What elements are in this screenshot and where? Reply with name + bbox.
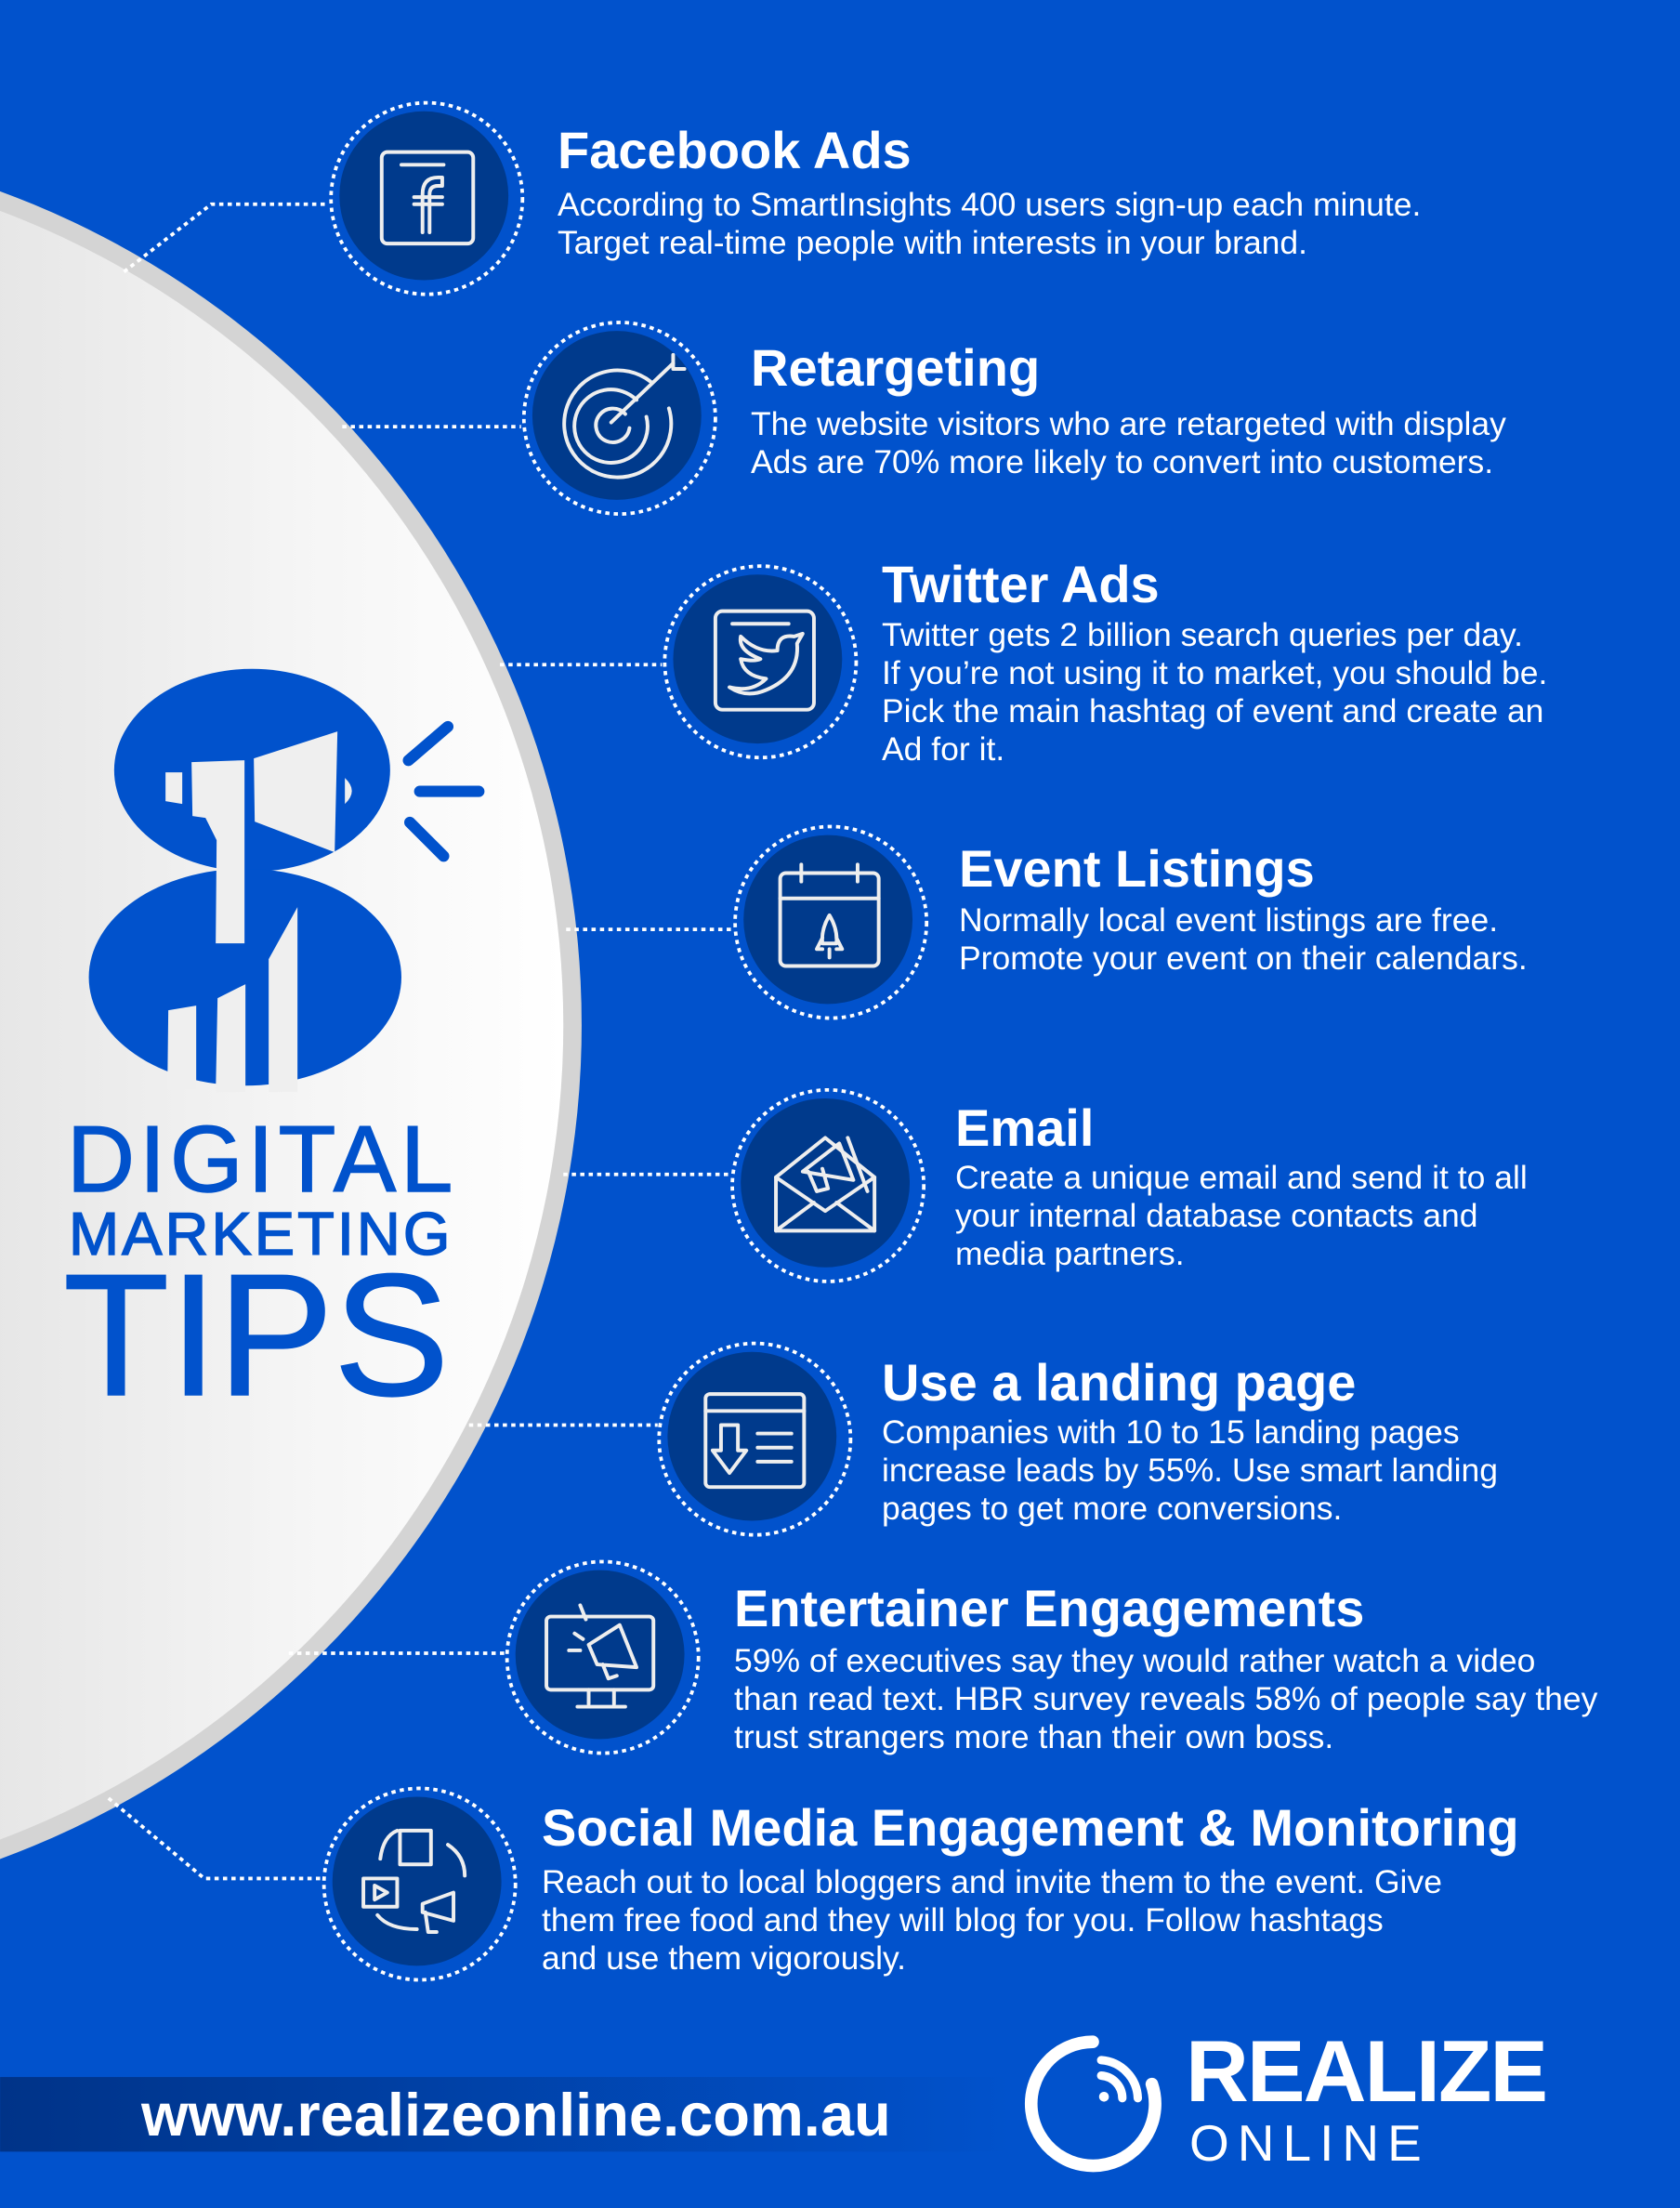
icon: facebook	[382, 152, 473, 243]
text: 59% of executives say they would rather watch a video	[734, 1642, 1535, 1679]
text: The website visitors who are retargeted with display	[751, 405, 1506, 442]
text: Email	[955, 1098, 1094, 1157]
text: Social Media Engagement & Monitoring	[542, 1798, 1519, 1857]
tip 3	[882, 555, 1547, 768]
logo text: ONLINE	[1189, 2114, 1430, 2172]
text: your internal database contacts and	[955, 1197, 1477, 1234]
text: Reach out to local bloggers and invite them to the event. Give	[542, 1863, 1442, 1900]
tip 5	[955, 1098, 1528, 1272]
tip 1	[558, 121, 1421, 261]
text: Target real-time people with interests in your brand.	[558, 224, 1307, 261]
text: MARKETING	[69, 1200, 453, 1268]
text: According to SmartInsights 400 users sign-up each minute.	[558, 186, 1421, 223]
footer url: www.realizeonline.com.au	[141, 2081, 891, 2149]
icon: email	[776, 1137, 874, 1230]
tip 6	[882, 1353, 1498, 1527]
icon circles	[324, 103, 926, 1980]
footer band	[0, 2077, 1014, 2151]
text: DIGITAL	[67, 1108, 457, 1212]
text: pages to get more conversions.	[882, 1490, 1342, 1527]
text: media partners.	[955, 1235, 1185, 1272]
text: TIPS	[63, 1238, 450, 1432]
icon: social cycle	[363, 1831, 465, 1932]
icons	[363, 152, 879, 1932]
tip 7	[734, 1579, 1598, 1755]
text: Facebook Ads	[558, 121, 912, 179]
text: Entertainer Engagements	[734, 1579, 1364, 1637]
text: Ads are 70% more likely to convert into customers.	[751, 443, 1493, 480]
big title: DIGITAL MARKETING TIPS	[63, 1108, 457, 1432]
logo icon	[1031, 2042, 1155, 2166]
text: increase leads by 55%. Use smart landing	[882, 1452, 1498, 1489]
text: trust strangers more than their own boss.	[734, 1718, 1333, 1755]
text: Promote your event on their calendars.	[959, 940, 1528, 977]
tip 2	[751, 338, 1506, 480]
text: Create a unique email and send it to all	[955, 1159, 1528, 1196]
icon: twitter	[715, 611, 814, 710]
text: Twitter gets 2 billion search queries per day.	[882, 616, 1523, 653]
text: Event Listings	[959, 839, 1315, 898]
text: Ad for it.	[882, 730, 1004, 768]
text: Use a landing page	[882, 1353, 1356, 1412]
tip 4	[959, 839, 1528, 977]
icon: calendar	[781, 864, 879, 966]
icon: landing page	[705, 1394, 804, 1487]
text: Twitter Ads	[882, 555, 1160, 613]
text: and use them vigorously.	[542, 1939, 906, 1977]
text: Retargeting	[751, 338, 1040, 397]
connectors	[109, 204, 732, 1878]
icon: monitor megaphone	[546, 1605, 653, 1707]
text: Normally local event listings are free.	[959, 901, 1498, 939]
logo text: REALIZE	[1186, 2022, 1546, 2120]
big white circle	[0, 137, 582, 1913]
text: than read text. HBR survey reveals 58% of people say they	[734, 1680, 1597, 1717]
text: them free food and they will blog for you. Follow hashtags	[542, 1901, 1384, 1939]
big 8 graphic	[89, 669, 479, 1092]
text: Companies with 10 to 15 landing pages	[882, 1413, 1460, 1451]
icon: target	[564, 355, 685, 478]
text: If you’re not using it to market, you should be.	[882, 654, 1547, 691]
text: Pick the main hashtag of event and create an	[882, 692, 1543, 729]
tip 8	[542, 1798, 1519, 1977]
logo text	[1186, 2022, 1546, 2172]
